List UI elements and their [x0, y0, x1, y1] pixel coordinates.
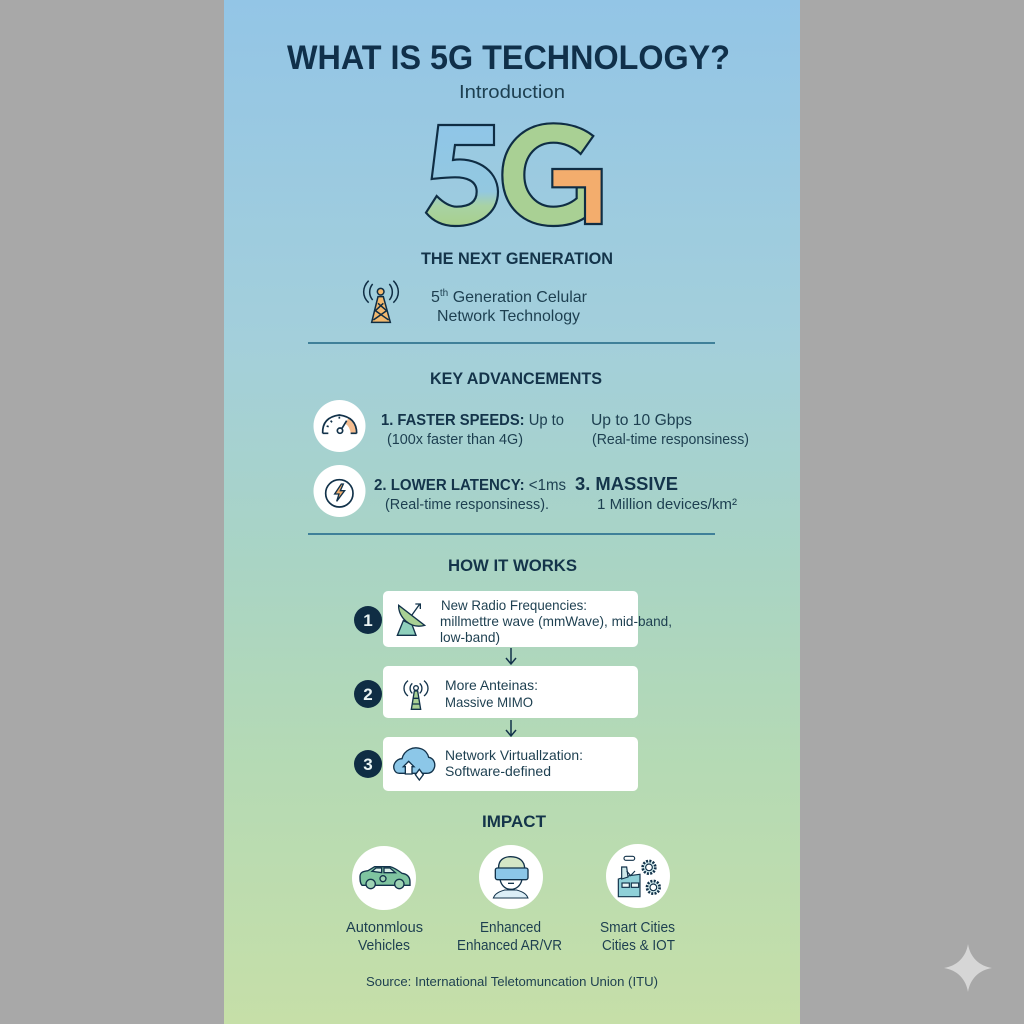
icon: lightning bolt — [314, 465, 366, 517]
advancement 2: lower latency: (Real-time responsiness). — [385, 497, 549, 513]
section heading: the next generation: THE NEXT GENERATION — [421, 249, 613, 268]
advancement 3: massive — [575, 474, 737, 513]
impact label: AR/VR: Enhanced — [480, 920, 541, 936]
advancement 2: lower latency — [374, 477, 566, 513]
icon: cloud — [394, 748, 435, 780]
impact label: smart cities — [600, 920, 675, 954]
step 2 card — [383, 666, 638, 718]
step 3 card: Software-defined — [445, 763, 551, 779]
step 1 card: New Radio Frequencies: — [441, 597, 587, 613]
tower description text: Network Technology — [437, 308, 580, 325]
tower description text — [431, 288, 588, 325]
impact label: AR/VR: Enhanced AR/VR — [457, 938, 562, 954]
icon: speedometer — [314, 400, 366, 452]
step 3 card: Network Virtuallzation: — [445, 747, 583, 763]
section heading: how it works: HOW IT WORKS — [448, 556, 577, 575]
icon: antenna — [404, 681, 428, 709]
subtitle: Introduction — [459, 81, 565, 102]
impact label: smart cities: Smart Cities — [600, 920, 675, 936]
step 3 card — [383, 737, 638, 791]
impact label: autonomous vehicles: Autonmlous — [346, 920, 423, 936]
advancement 1b: gigabit speed: (Real-time responsiness) — [592, 432, 749, 448]
advancement 2: lower latency: 2. LOWER LATENCY: <1ms — [374, 477, 566, 494]
tower description text: th — [440, 288, 448, 299]
infographic panel — [224, 0, 800, 1024]
advancement 1b: gigabit speed: Up to 10 Gbps — [591, 412, 692, 429]
tower description text: Generation Celular — [448, 289, 588, 306]
step 1 number: 1 — [363, 611, 373, 630]
icon: smart city factory — [606, 844, 670, 908]
step 2 card: Massive MIMO — [445, 694, 533, 710]
impact label: autonomous vehicles: Vehicles — [358, 938, 410, 954]
step 2 number — [354, 680, 382, 708]
impact label: autonomous vehicles — [346, 920, 423, 954]
arrow: step 2 to 3 — [506, 720, 516, 736]
advancement 3: massive: 1 Million devices/km² — [597, 496, 737, 513]
step 1 number — [354, 606, 382, 634]
advancement 3: massive: 3. MASSIVE — [575, 474, 678, 494]
step 2 number: 2 — [363, 685, 373, 704]
step 1 card — [383, 591, 672, 647]
title: WHAT IS 5G TECHNOLOGY? — [287, 39, 730, 77]
advancement 1: faster speeds: 1. FASTER SPEEDS: Up to — [381, 412, 564, 429]
advancement 1: faster speeds: (100x faster than 4G) — [387, 432, 523, 448]
arrow: step 1 to 2 — [506, 648, 516, 664]
5G logo — [426, 123, 602, 226]
section heading: key advancements: KEY ADVANCEMENTS — [430, 369, 602, 388]
tower description text: 5 — [431, 289, 440, 306]
section heading: impact: IMPACT — [482, 812, 547, 831]
advancement 1b: gigabit speed — [591, 412, 749, 448]
icon: autonomous car — [352, 846, 416, 910]
icon: satellite dish — [397, 604, 425, 635]
impact label: AR/VR — [457, 920, 562, 954]
impact label: smart cities: Cities & IOT — [602, 938, 675, 954]
step 1 card: millmettre wave (mmWave), mid-band, — [440, 613, 672, 629]
step 3 number — [354, 750, 382, 778]
icon: sparkle watermark — [944, 944, 992, 992]
source line: Source: International Teletomuncation Union (ITU) — [366, 974, 658, 989]
step 3 number: 3 — [363, 755, 373, 774]
advancement 1: faster speeds — [381, 412, 564, 448]
icon: cell tower — [364, 281, 398, 322]
icon: VR headset person — [479, 845, 543, 909]
step 2 card: More Anteinas: — [445, 677, 538, 693]
step 1 card: low-band) — [440, 629, 500, 645]
